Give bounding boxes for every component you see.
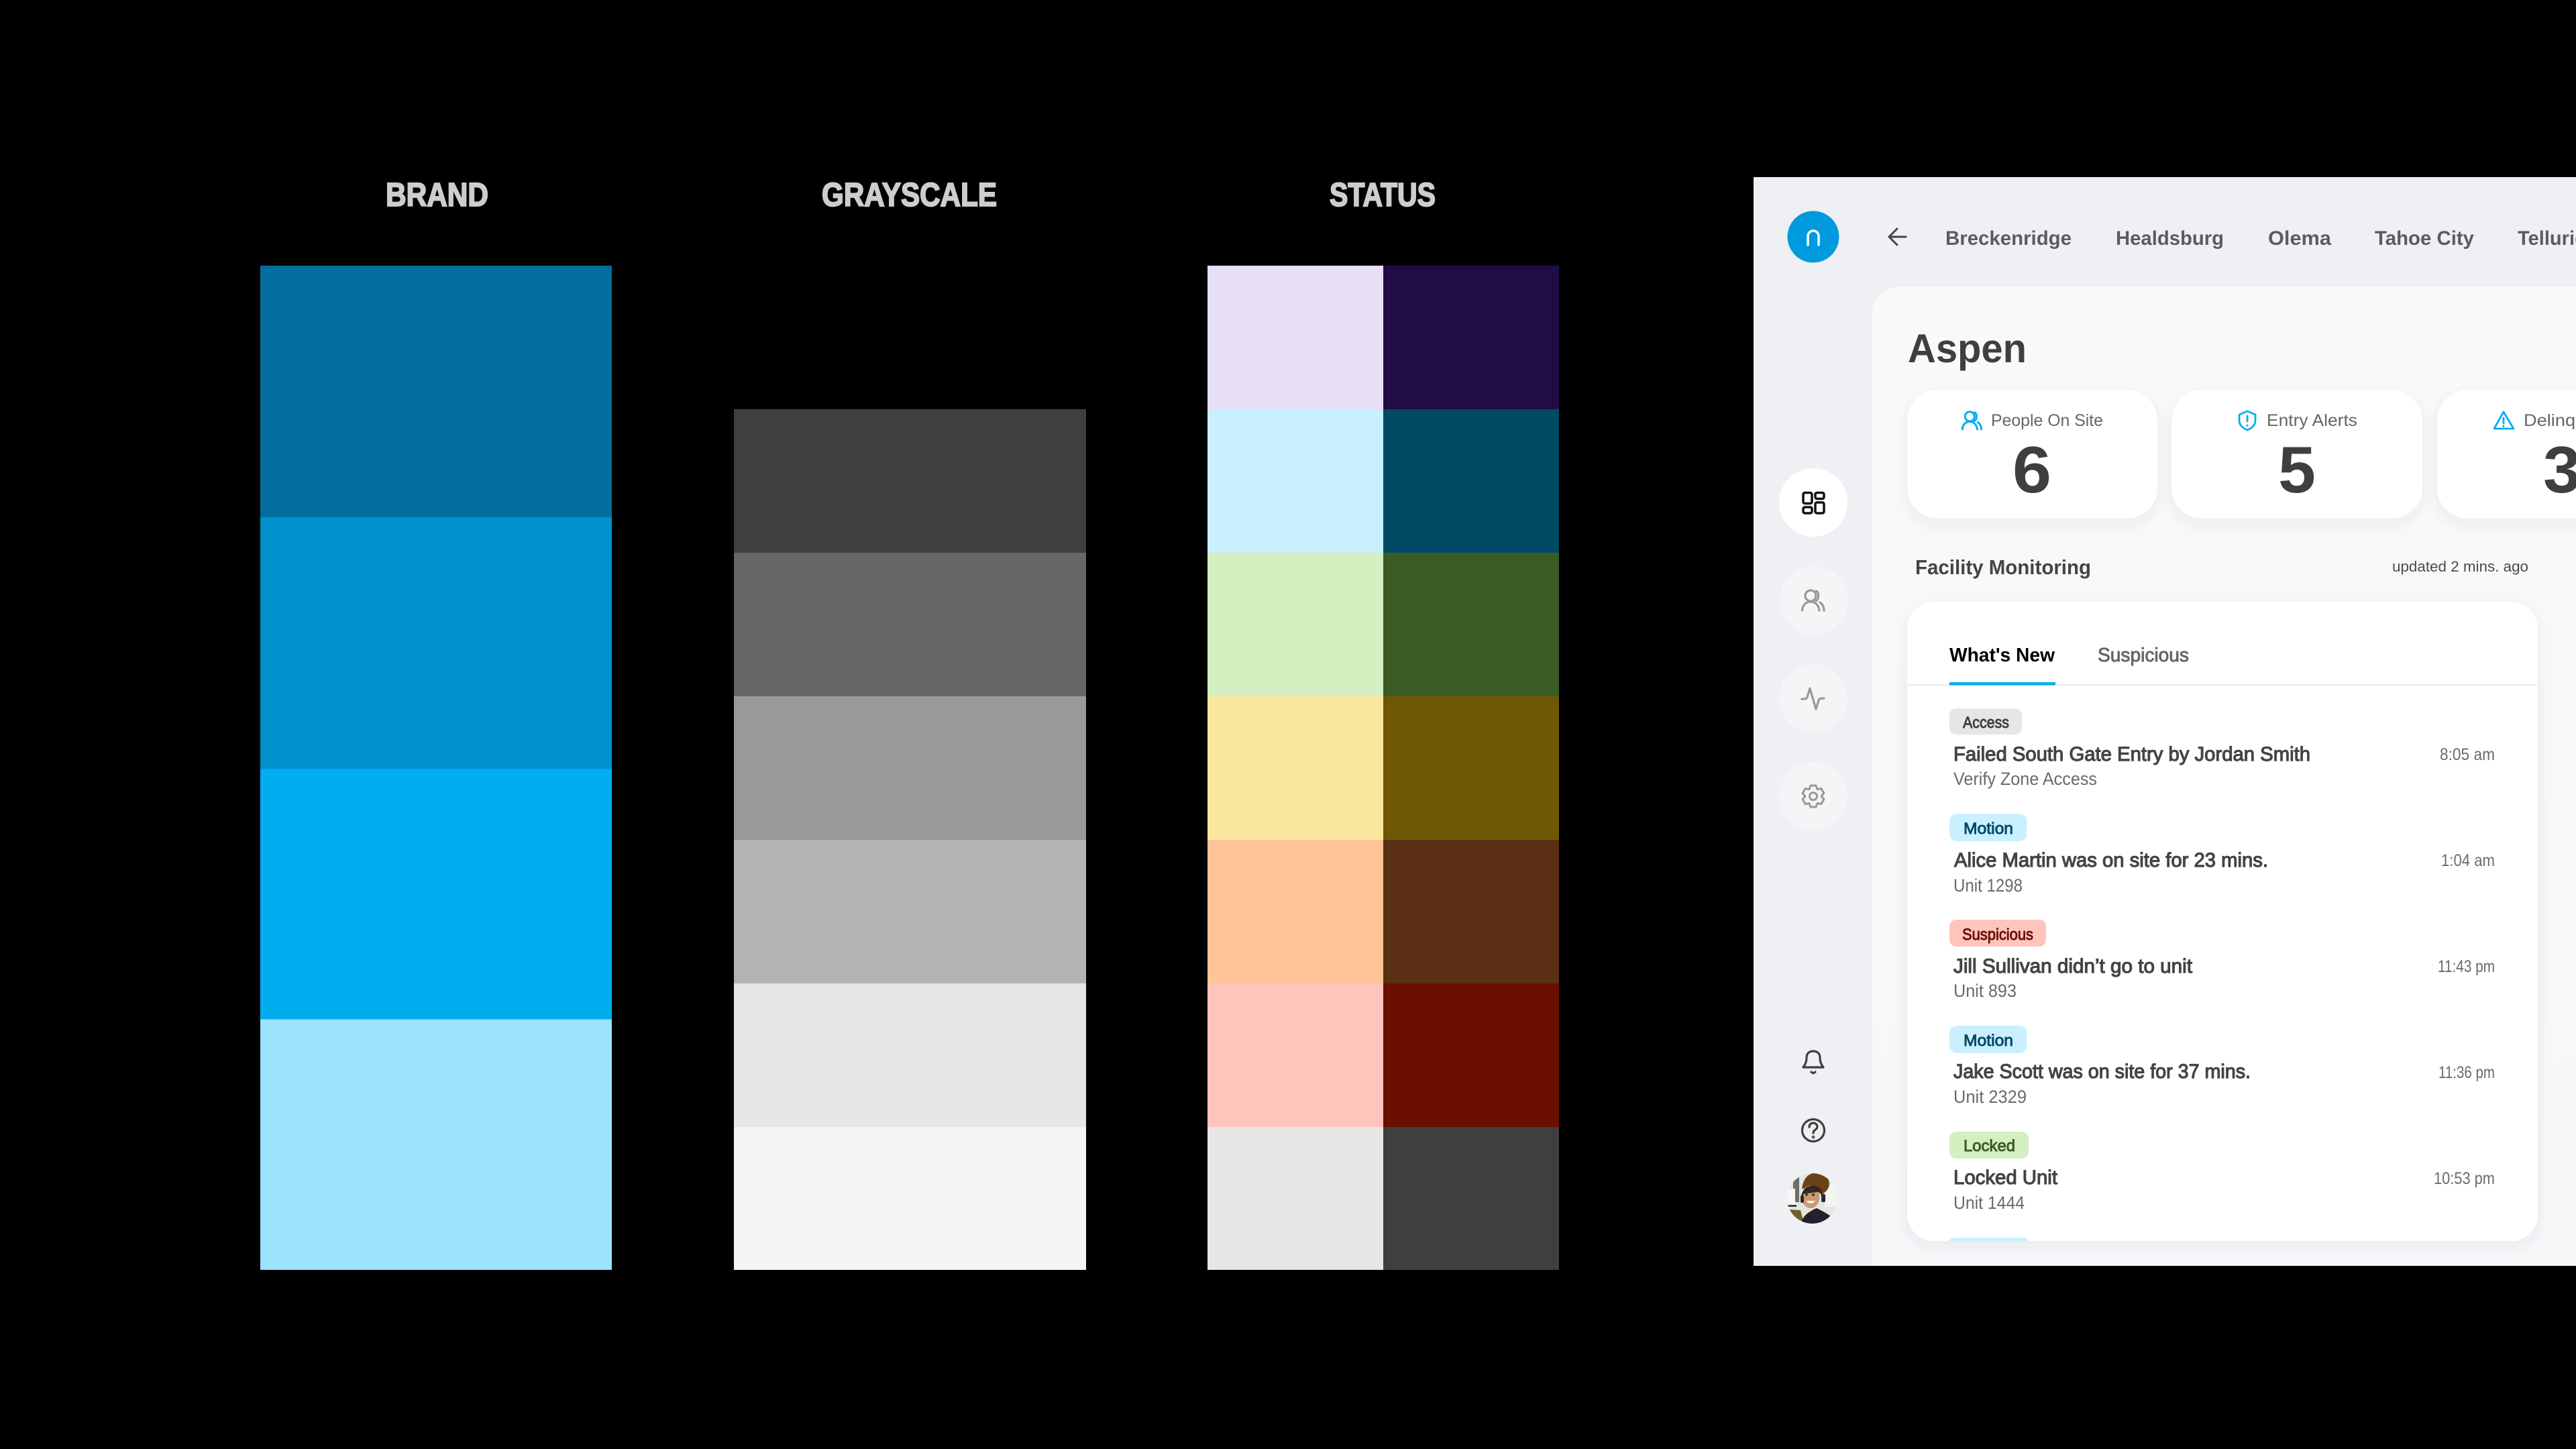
feed item: failed entry: 8:05 am xyxy=(2440,745,2495,764)
feed item: Jake Scott: Unit 2329 xyxy=(1953,1087,2027,1107)
feed item: Alice Martin xyxy=(1949,814,2495,896)
tabs: Suspicious xyxy=(2098,645,2189,666)
feed item: Jake Scott xyxy=(1949,1026,2495,1107)
palette: status swatches xyxy=(1208,266,1559,1270)
text: last updated: updated 2 mins. ago xyxy=(2392,558,2528,575)
card: entry alerts: Entry Alerts xyxy=(2267,411,2357,430)
feed item: Jill Sullivan: Suspicious xyxy=(1962,926,2033,944)
feed item: Jake Scott: Jake Scott was on site for 37 mins. xyxy=(1953,1061,2251,1083)
partial badge cut off by card edge xyxy=(1949,1238,2028,1241)
card: entry alerts: 5 xyxy=(2278,433,2316,506)
navigation tabs: Tahoe City xyxy=(2375,227,2474,250)
title: Aspen: Aspen xyxy=(1908,326,2027,371)
icon: help xyxy=(1802,1119,1825,1142)
icon: logo xyxy=(1787,211,1839,263)
avatar: user photo xyxy=(1788,1173,1836,1224)
feed item: locked unit xyxy=(1949,1132,2495,1213)
feed item: failed entry: Access xyxy=(1963,714,2009,732)
card: people on site: People On Site xyxy=(1991,411,2103,430)
feed item: locked unit: Locked xyxy=(1964,1137,2015,1155)
panel: dashboard preview xyxy=(1754,177,2576,1266)
card: delinquent xyxy=(2437,390,2576,519)
navigation tabs xyxy=(1945,227,2576,250)
heading: facility monitoring: Facility Monitoring xyxy=(1915,555,2091,579)
icon: back arrow xyxy=(1889,229,1906,245)
heading: status: STATUS xyxy=(1330,177,1436,213)
icon: settings gear xyxy=(1803,786,1824,807)
panel: activity feed xyxy=(1907,602,2538,1241)
feed item: Alice Martin: 1:04 am xyxy=(2441,851,2495,870)
icon: warning triangle xyxy=(2494,412,2514,429)
card: entry alerts xyxy=(2171,390,2422,519)
feed item: failed entry xyxy=(1949,708,2495,789)
feed item: Jill Sullivan: Jill Sullivan didn’t go to unit xyxy=(1953,955,2193,977)
card: people on site: 6 xyxy=(2012,433,2051,506)
feed item: failed entry: Verify Zone Access xyxy=(1953,769,2097,789)
feed item: Alice Martin: Motion xyxy=(1964,820,2013,838)
icon: shield alert xyxy=(2239,411,2255,430)
navigation tabs: Breckenridge xyxy=(1945,227,2072,250)
feed item: failed entry: Failed South Gate Entry by Jordan Smith xyxy=(1953,743,2310,765)
feed item: Jill Sullivan: Unit 893 xyxy=(1953,981,2017,1001)
feed item: Jake Scott: Motion xyxy=(1964,1032,2013,1050)
tabs: What's New xyxy=(1949,645,2055,666)
heading: brand: BRAND xyxy=(386,177,488,213)
palette: brand swatches xyxy=(260,266,612,1270)
tabs xyxy=(1907,645,2538,686)
icon: people blue xyxy=(1962,412,1982,429)
card: people on site xyxy=(1907,390,2157,519)
feed item: locked unit: Locked Unit xyxy=(1953,1167,2058,1189)
panel: main content xyxy=(1872,287,2576,1266)
feed item: Jill Sullivan: 11:43 pm xyxy=(2438,957,2495,976)
feed item: Alice Martin: Unit 1298 xyxy=(1953,875,2023,896)
icon: bell xyxy=(1803,1051,1823,1073)
navigation tabs: Healdsburg xyxy=(2116,227,2224,250)
heading: grayscale: GRAYSCALE xyxy=(822,177,997,213)
palette: grayscale swatches xyxy=(734,409,1086,1270)
feed item: Jake Scott: 11:36 pm xyxy=(2438,1063,2495,1082)
feed item: Alice Martin: Alice Martin was on site for 23 mins. xyxy=(1954,849,2268,871)
icon: dashboard xyxy=(1803,492,1824,513)
icon: pulse xyxy=(1802,688,1824,709)
navigation tabs: Olema xyxy=(2268,227,2331,250)
feed item: Jill Sullivan xyxy=(1949,920,2495,1001)
feed item: locked unit: Unit 1444 xyxy=(1953,1193,2025,1213)
sidebar navigation xyxy=(1779,468,1847,1228)
icon: people xyxy=(1802,590,1824,610)
feed item: locked unit: 10:53 pm xyxy=(2434,1169,2495,1188)
